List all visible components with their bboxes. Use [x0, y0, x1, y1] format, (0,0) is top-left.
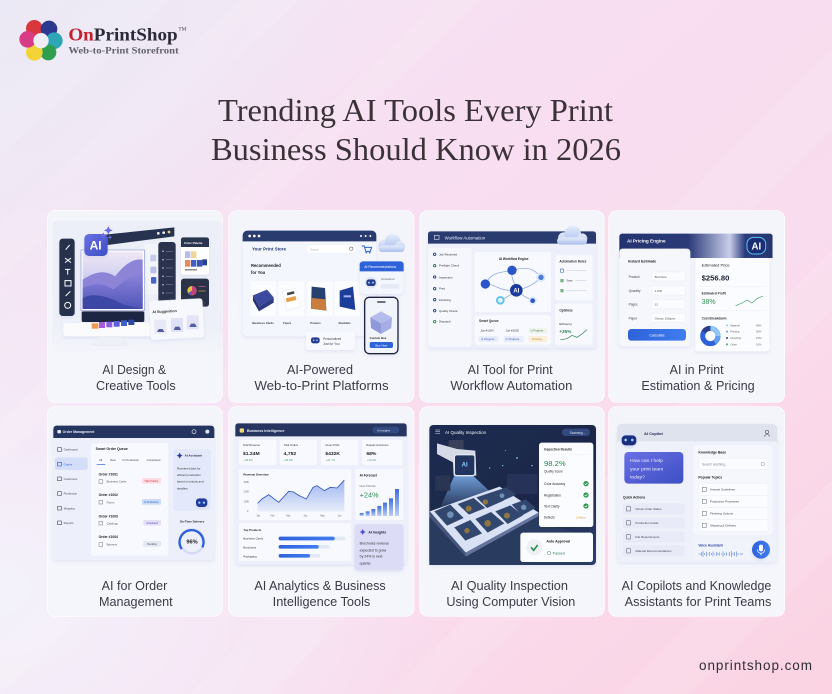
label: Order Management: [99, 579, 173, 609]
smart order queue: Order #1001: [99, 472, 118, 476]
personalized tag: Just for You: [323, 342, 340, 346]
inspection scene: [429, 425, 596, 565]
sidebar nav: Production: [64, 492, 78, 496]
AI insights card: expected to grow: [360, 548, 387, 552]
smart order queue: Smart Order Queue: [96, 447, 128, 451]
quick actions: [623, 495, 685, 556]
automation rules: [555, 255, 593, 300]
KPI cards: Total Orders: [284, 443, 299, 447]
chart: revenue overview: 300K: [244, 482, 250, 484]
smart order queue: Scheduled: [146, 522, 158, 525]
toolbar: [59, 239, 75, 316]
quick actions: Material Recommendations: [635, 549, 672, 553]
workflow window: Workflow Automation: [445, 235, 486, 240]
inspection results card: 2 Minor: [576, 516, 586, 520]
chart: top products: Top Products: [243, 528, 262, 532]
smart order queue: High Priority: [145, 480, 159, 483]
inspection results card: Quality Score: [544, 469, 563, 473]
smart queue: Smart Queue: [479, 319, 499, 323]
icon: colour flower: [19, 20, 63, 61]
chart: revenue overview: Jun: [338, 516, 342, 518]
chart: revenue overview: Revenue Overview: [243, 472, 269, 476]
panel: AI Quality Inspection Using Computer Vision: [420, 407, 604, 616]
AI recommendations card: Consumer: [381, 277, 395, 281]
instant estimate form: 1,000: [655, 289, 662, 293]
order window: [53, 426, 214, 560]
estimated price panel: Cost Breakdown: [702, 316, 727, 320]
pricing illustration: [619, 234, 773, 351]
camera: [435, 440, 476, 491]
AI insights card: Brochures revenue: [360, 542, 389, 546]
AI assistant panel: AI Assistant: [185, 454, 202, 458]
product cards: Business Cards: [252, 321, 274, 325]
product cards: [250, 281, 360, 325]
browser window: Recommended: [251, 263, 281, 268]
product cards: Posters: [310, 321, 321, 325]
browser window: for You: [251, 270, 266, 275]
panel: AI in Print Estimation & Pricing: [609, 211, 785, 402]
chart: revenue overview: Jan: [256, 516, 261, 518]
knowledge base: Search anything...: [702, 463, 728, 467]
quick actions: File Requirements: [635, 535, 660, 539]
smart order queue: In Production: [144, 501, 159, 504]
inspection results card: 98.2%: [544, 459, 566, 468]
voice assistant: [694, 539, 773, 560]
label: AI Design: [96, 363, 176, 393]
smart order queue: Business Cards: [107, 480, 127, 484]
chart: revenue overview: 200K: [244, 492, 250, 494]
AI badge: [84, 234, 108, 256]
chart: AI forecast: +24%: [360, 491, 379, 500]
AI recommendations card: [360, 261, 404, 294]
pricing header: AI Pricing Engine: [627, 239, 666, 244]
copilot window: AI Copilot: [644, 431, 663, 436]
label: Web-to-Print: Web-to-Print Platforms: [254, 379, 389, 393]
chart: revenue overview: 0: [247, 511, 249, 513]
job steps list: Print: [439, 287, 445, 291]
browser window: Your Print Store: [252, 247, 287, 252]
order window: Order Management: [63, 430, 95, 434]
chart: top products: [239, 523, 351, 561]
dashboard window: Business Intelligence: [247, 429, 284, 433]
browser window: Search: [310, 247, 319, 251]
instant estimate form: Quantity: [629, 289, 641, 293]
KPI cards: +10.4%: [367, 458, 377, 462]
knowledge base: Finishing Options: [710, 512, 734, 516]
sidebar nav: Reports: [64, 521, 74, 525]
website URL: onprintshop.com: [699, 658, 812, 673]
estimated price panel: Printing: [730, 330, 740, 334]
label: Pricing: [641, 363, 755, 393]
icon: cloud: [378, 234, 405, 252]
job steps list: [428, 248, 471, 346]
panel: AI Design & Creative Tools: [47, 210, 222, 402]
sidebar nav: Orders: [64, 462, 73, 466]
AI insights card: AI Insights: [368, 530, 386, 534]
KPI cards: 4,752: [284, 451, 296, 457]
chart: top products: Brochures: [243, 545, 257, 549]
AI recommendations card: AI Recommendations: [364, 265, 396, 269]
smart order queue: Order #1003: [99, 514, 118, 518]
workflow window: [428, 226, 596, 348]
label: Workflow: AI Tool for Print: [468, 363, 553, 377]
AI insights card: by 24% in next: [360, 555, 383, 559]
instant estimate form: Glossy 150gsm: [655, 316, 676, 320]
logo: OnPrintShop: [19, 20, 187, 61]
job steps list: Dispatch: [439, 320, 451, 324]
smart queue: Job #1024: [480, 329, 494, 333]
chat bubble: today?: [630, 475, 645, 481]
label: Quality Inspection: AI Quality Inspection: [451, 579, 568, 593]
panel: AI Analytics & Business Intelligence Tools: [229, 407, 414, 616]
icon: AI chip: AI: [752, 241, 761, 252]
knowledge base: Knowledge Base: [698, 450, 726, 454]
AI insights card: [355, 524, 403, 570]
KPI cards: 68%: [366, 451, 377, 457]
icon: cloud: [557, 226, 587, 245]
personalized tag: [306, 332, 355, 350]
auto approval card: [520, 533, 593, 562]
voice assistant: Voice Assistant: [698, 543, 724, 547]
chat bubble: your print team: [630, 466, 663, 472]
label: Pricing: AI in Print: [670, 363, 724, 377]
label: Analytics: Intelligence Tools: [273, 595, 370, 609]
chart: cost donut: [703, 328, 718, 344]
icon: microphone button: [752, 541, 770, 559]
layers panel: [158, 242, 176, 303]
knowledge base: [694, 446, 773, 535]
estimated price panel: Material: [730, 323, 740, 327]
AI suggestion card: AI Suggestion: [152, 309, 177, 314]
pricing header: [619, 234, 773, 258]
title: Business Should Know in 2026: [211, 131, 621, 167]
label: Order Management: AI for Order: [102, 579, 167, 593]
workflow engine diagram: AI: [513, 289, 520, 295]
store illustration: [243, 231, 405, 354]
smart order queue: In Production: [122, 458, 139, 462]
inspection results card: Text Clarity: [544, 504, 560, 508]
label: AI Design: Creative Tools: [96, 379, 176, 393]
smart queue: Pending: [532, 337, 542, 341]
chat bubble: [624, 452, 683, 484]
instant estimate form: [619, 249, 690, 346]
inspection scene: AI Quality Inspection: [445, 430, 487, 435]
inspection results card: Inspection Results: [544, 448, 572, 452]
instant estimate form: Brochure: [655, 275, 667, 279]
smart order queue: Banners: [107, 543, 118, 547]
chart: revenue overview: Apr: [304, 515, 308, 518]
instant estimate form: Pages: [629, 303, 638, 307]
label: Copilots: AI Copilots and Knowledge: [622, 579, 771, 593]
dashboard window: AI Insights: [377, 428, 391, 432]
automation rules: Automation Rules: [559, 259, 587, 263]
icon: robot: [620, 431, 638, 449]
knowledge base: Production Processes: [710, 500, 740, 504]
optimize panel: [555, 304, 593, 345]
optimize panel: Efficiency: [559, 322, 573, 326]
chart: AI forecast: [355, 469, 403, 520]
smart order queue: Flyers: [107, 500, 115, 504]
on-time delivery gauge: On-Time Delivery: [180, 520, 205, 524]
product cards: Flyers: [283, 321, 292, 325]
estimated price panel: Finishing: [730, 336, 741, 340]
colour wheel card: [181, 279, 209, 307]
label: Pricing: Estimation & Pricing: [641, 379, 755, 393]
chart: revenue overview: May: [320, 516, 326, 518]
KPI cards: [239, 440, 403, 465]
chart: revenue overview: [239, 469, 351, 520]
KPI cards: $1.24M: [243, 451, 260, 457]
job steps list: Preflight Check: [439, 264, 460, 268]
AI assistant panel: efficient production: [177, 473, 201, 477]
AI insights card: quarter.: [360, 561, 372, 565]
panel: AI Copilots and Knowledge Assistants for Print Teams: [609, 407, 785, 616]
panel: AI-Powered Web-to-Print Platforms: [229, 211, 414, 402]
label: AI Design: AI Design &: [102, 363, 167, 377]
personalized tag: Personalized: [323, 337, 341, 341]
AI assistant panel: Reordered jobs for: [177, 467, 200, 471]
chart: revenue overview: 100K: [244, 501, 250, 503]
label: Web-to-Print: AI-Powered: [287, 363, 353, 377]
AI badge: AI: [90, 238, 102, 252]
KPI cards: Total Revenue: [243, 443, 261, 447]
smart order queue: All: [99, 458, 103, 462]
estimated price panel: 10%: [756, 342, 762, 346]
inspection results card: Color Accuracy: [544, 482, 566, 486]
chart: top products: Packaging: [243, 554, 257, 558]
instant estimate form: Calculate: [649, 333, 665, 337]
job steps list: Job Received: [439, 252, 457, 256]
on-time delivery gauge: 96%: [186, 539, 198, 545]
AI assistant panel: based on priority and: [177, 480, 204, 484]
label: Workflow: Workflow Automation: [450, 379, 572, 393]
smart queue: In Progress: [481, 337, 495, 341]
smart order queue: Order #1002: [99, 493, 118, 497]
instant estimate form: 12: [655, 303, 658, 307]
logo tagline: Web-to-Print Storefront: [68, 46, 180, 56]
icon: AI chip: [747, 237, 766, 254]
estimated price panel: 45%: [756, 323, 762, 327]
knowledge base: Artwork Guidelines: [710, 488, 736, 492]
print sheet tray: [430, 487, 539, 557]
chart: AI forecast: Next 3 Months: [360, 485, 376, 488]
KPI cards: $432K: [325, 451, 340, 457]
smart queue: In Progress: [531, 330, 544, 333]
job steps list: Inspection: [439, 275, 453, 279]
AI assistant panel: deadline.: [177, 486, 189, 490]
auto approval card: Auto Approval: [546, 539, 570, 543]
colour palette card: [181, 237, 209, 275]
smart queue: Job #1025: [506, 329, 519, 333]
knowledge base: Popular Topics: [698, 476, 722, 480]
chart: revenue overview: Feb: [270, 516, 275, 518]
quick actions: Production Guide: [635, 521, 659, 525]
KPI cards: +21.7%: [326, 458, 336, 462]
copilot window: [617, 424, 777, 562]
title: [211, 92, 621, 167]
sidebar nav: [55, 448, 88, 525]
inspection results card: Registration: [544, 493, 561, 497]
estimated price panel: Estimated Price: [702, 263, 730, 268]
label: Copilots: [622, 579, 771, 609]
auto approval card: Passed: [553, 551, 565, 555]
workflow engine diagram: [475, 252, 551, 312]
on-time delivery gauge: [180, 520, 205, 553]
KPI cards: +18.6%: [244, 458, 253, 462]
KPI cards: Gross Profit: [325, 443, 340, 447]
phone mockup: [365, 297, 398, 354]
panel: AI Tool for Print Workflow Automation: [420, 211, 604, 402]
quick actions: Quick Actions: [623, 495, 645, 499]
label: Analytics: AI Analytics & Business: [254, 579, 386, 593]
optimize panel: Optimize: [559, 308, 573, 312]
estimated price panel: 38%: [702, 299, 716, 306]
AI assistant panel: [173, 449, 211, 511]
label: Web-to-Print: [254, 363, 389, 393]
job steps list: Quality Check: [439, 309, 458, 313]
smart order queue: [91, 443, 168, 556]
smart order queue: Pending: [147, 543, 157, 546]
AI suggestion card: [149, 298, 204, 340]
label: Copilots: Assistants for Print Teams: [625, 595, 771, 609]
dashboard window: [235, 423, 407, 570]
chart: top products: Business Cards: [243, 537, 264, 541]
label: Analytics: [254, 579, 386, 609]
browser window: [243, 231, 376, 336]
estimated price panel: 15%: [756, 336, 762, 340]
colour palette card: Color Palette: [184, 241, 203, 245]
estimated price panel: $256.80: [702, 274, 729, 283]
smart queue: [475, 315, 551, 345]
instant estimate form: Product: [629, 275, 640, 279]
illustration: design monitor: [52, 221, 222, 354]
instant estimate form: Paper: [629, 316, 637, 320]
smart order queue: Catalogs: [107, 521, 118, 525]
estimated price panel: Other: [730, 342, 737, 346]
label: Quality Inspection: [446, 579, 575, 609]
label: Quality Inspection: Using Computer Vision: [446, 595, 575, 609]
phone mockup: Buy Now: [375, 343, 388, 347]
sidebar nav: Shipping: [64, 506, 75, 510]
estimated price panel: 30%: [756, 330, 762, 334]
logo wordmark: OnPrintShop: [68, 25, 178, 45]
phone mockup: Custom Box: [370, 336, 387, 340]
panel: AI for Order Management: [47, 407, 222, 616]
inspection results card: Defects: [544, 516, 555, 520]
estimated price panel: [695, 258, 769, 351]
smart order queue: Completed: [147, 458, 161, 462]
smart order queue: New: [110, 458, 117, 462]
estimated price panel: Estimated Profit: [702, 291, 727, 295]
job steps list: Finishing: [439, 298, 451, 302]
KPI cards: +16.3%: [284, 458, 293, 462]
KPI cards: Repeat Customers: [366, 443, 389, 447]
inspection results card: [539, 443, 593, 527]
chart: revenue overview: Mar: [286, 515, 291, 518]
quick actions: Check Order Status: [635, 507, 662, 511]
sidebar nav: Dashboard: [64, 448, 78, 452]
inspection scene: Scanning...: [570, 431, 586, 435]
camera: AI: [462, 463, 468, 469]
automation rules: Save: [567, 279, 573, 283]
sidebar nav: Customers: [64, 477, 78, 481]
optimize panel: +35%: [559, 329, 572, 334]
label: Order Management: Management: [99, 595, 173, 609]
chart: AI forecast: AI Forecast: [360, 474, 378, 478]
label: Workflow: [450, 363, 572, 393]
trademark: TM: [178, 27, 187, 33]
chat bubble: How can I help: [630, 458, 663, 464]
smart queue: In Progress: [506, 337, 520, 341]
product cards: Booklets: [339, 321, 351, 325]
knowledge base: Shipping & Delivery: [710, 524, 737, 528]
title: Trending AI Tools Every Print: [218, 92, 613, 128]
smart order queue: Order #1004: [99, 535, 118, 539]
workflow engine diagram: AI Workflow Engine: [499, 257, 529, 261]
instant estimate form: Instant Estimate: [628, 259, 656, 263]
